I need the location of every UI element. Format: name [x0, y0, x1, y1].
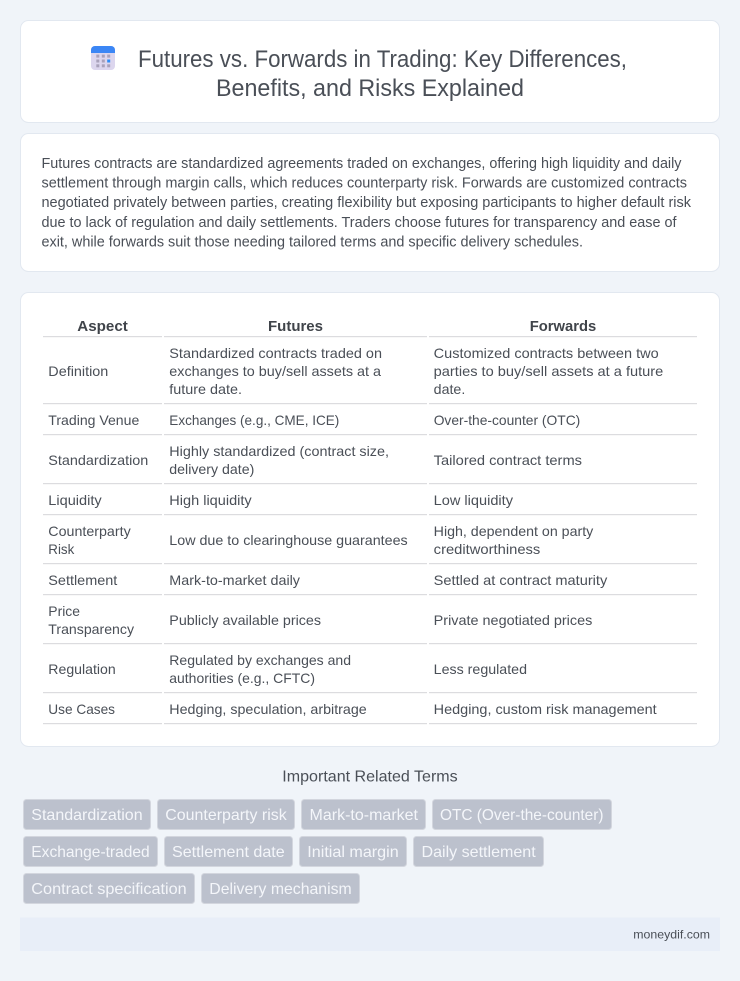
table header row: Forwards: [530, 318, 596, 335]
row: regulation: [48, 652, 527, 686]
row: regulation: Regulated by exchanges and: [169, 652, 351, 668]
text block: summary: due to lack of regulation and daily settlements. Traders choose futures for transparency and ease of: [42, 215, 677, 231]
row: settlement: Settled at contract maturity: [434, 572, 607, 588]
row: counterparty risk: Risk: [48, 541, 75, 557]
row: regulation: authorities (e.g., CFTC): [169, 670, 315, 686]
tag: counterparty risk: [158, 800, 294, 830]
tag: daily settlement: Daily settlement: [422, 844, 536, 861]
row: definition: Standardized contracts traded on: [169, 345, 382, 361]
panel: description: [20, 134, 720, 272]
panel: header: [20, 20, 720, 122]
title: Futures vs. Forwards in Trading: Key Differences,: [138, 46, 627, 73]
row: price transparency: Price: [48, 603, 80, 619]
tag: counterparty risk: Counterparty risk: [165, 807, 288, 824]
tag: initial margin: [300, 836, 406, 866]
tag: otc: OTC (Over-the-counter): [440, 807, 604, 824]
row: settlement: [48, 572, 607, 588]
row: liquidity: High liquidity: [169, 492, 252, 508]
row: use cases: Hedging, custom risk management: [434, 701, 657, 717]
tag: delivery mechanism: [202, 874, 360, 904]
row: liquidity: Low liquidity: [434, 492, 513, 508]
heading: important related terms: Important Related Terms: [282, 769, 458, 786]
row: definition: exchanges to buy/sell assets at a: [169, 363, 381, 379]
tag: exchange-traded: Exchange-traded: [31, 844, 150, 861]
row: price transparency: Private negotiated prices: [434, 612, 592, 628]
text block: summary: Futures contracts are standardized agreements traded on exchanges, offering high liquidity and daily: [42, 156, 682, 172]
text block: summary: settlement through margin calls, which reduces counterparty risk. Forwards are customized contracts: [42, 176, 687, 192]
row: standardization: delivery date): [169, 461, 254, 477]
footer: [20, 918, 720, 951]
row: trading venue: [48, 412, 580, 428]
row: price transparency: Transparency: [48, 621, 134, 637]
row: use cases: Use Cases: [48, 701, 115, 717]
tag: contract specification: Contract specification: [31, 881, 187, 898]
row: definition: date.: [434, 381, 465, 397]
tag: mark-to-market: [302, 800, 426, 830]
table header row: Aspect: [77, 318, 128, 335]
row: price transparency: [48, 603, 592, 637]
row: trading venue: Trading Venue: [48, 412, 140, 428]
tag: mark-to-market: Mark-to-market: [310, 807, 419, 824]
row: definition: Customized contracts between two: [434, 345, 659, 361]
tag: standardization: Standardization: [31, 807, 143, 824]
row: counterparty risk: High, dependent on party: [434, 523, 593, 539]
text block: summary: exit, while forwards suit those needing tailored terms and specific delivery schedules.: [42, 234, 583, 250]
row: standardization: Highly standardized (contract size,: [169, 443, 389, 459]
title: [138, 46, 627, 102]
row: use cases: [48, 701, 657, 717]
row: definition: future date.: [169, 381, 242, 397]
tag: delivery mechanism: Delivery mechanism: [209, 881, 352, 898]
panel: related term tags: [24, 800, 612, 904]
tag: otc: [432, 800, 612, 830]
row: counterparty risk: creditworthiness: [434, 541, 540, 557]
row: liquidity: Liquidity: [48, 492, 102, 508]
text block: summary: negotiated privately between parties, creating flexibility but exposing participants to higher default risk: [42, 195, 692, 211]
title: Benefits, and Risks Explained: [216, 75, 524, 102]
tag: settlement date: [164, 836, 292, 866]
row: counterparty risk: Counterparty: [48, 523, 131, 539]
row: liquidity: [48, 492, 513, 508]
tag: contract specification: [24, 874, 194, 904]
row: trading venue: Over-the-counter (OTC): [434, 412, 580, 428]
row: definition: [48, 345, 664, 397]
row: price transparency: Publicly available prices: [169, 612, 321, 628]
panel: comparison table: [20, 292, 720, 746]
row: settlement: Settlement: [48, 572, 117, 588]
footer: moneydif.com: [633, 927, 710, 941]
tag: initial margin: Initial margin: [307, 844, 399, 861]
table header row: [77, 318, 596, 335]
text block: summary: [42, 156, 692, 250]
row: regulation: Less regulated: [434, 661, 527, 677]
row: use cases: Hedging, speculation, arbitrage: [169, 701, 367, 717]
row: trading venue: Exchanges (e.g., CME, ICE): [169, 412, 339, 428]
row: counterparty risk: Low due to clearinghouse guarantees: [169, 532, 408, 548]
icon: calendar: [91, 46, 115, 70]
row: definition: Definition: [48, 363, 108, 379]
row: standardization: [48, 443, 582, 477]
tag: settlement date: Settlement date: [172, 844, 285, 861]
table header row: Futures: [268, 318, 323, 335]
row: standardization: Standardization: [48, 452, 148, 468]
tag: standardization: [24, 800, 150, 830]
row: definition: parties to buy/sell assets at a future: [434, 363, 664, 379]
tag: exchange-traded: [24, 836, 158, 866]
row: counterparty risk: [48, 523, 593, 557]
row: regulation: Regulation: [48, 661, 116, 677]
row: standardization: Tailored contract terms: [434, 452, 582, 468]
tag: daily settlement: [414, 836, 544, 866]
row: settlement: Mark-to-market daily: [169, 572, 300, 588]
